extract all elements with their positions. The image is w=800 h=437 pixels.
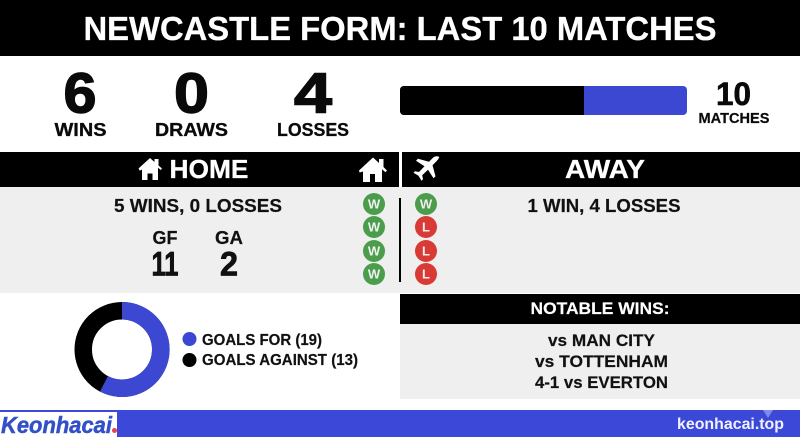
- panel: notable wins: [400, 294, 800, 399]
- notable wins heading: NOTABLE WINS:: [530, 299, 670, 318]
- stat: total matches: 10: [716, 76, 751, 112]
- home result badges: W: [368, 196, 381, 212]
- away header band: AWAY: [565, 154, 645, 184]
- title banner: [0, 0, 800, 56]
- away result badges: L: [422, 220, 430, 234]
- home header band: HOME: [170, 154, 248, 184]
- stat: wins: [54, 62, 106, 140]
- panel: home and away results: [0, 187, 800, 293]
- away header band: [402, 152, 800, 187]
- away result badges: L: [422, 244, 430, 258]
- legend: GOALS AGAINST (13): [202, 352, 358, 369]
- home record: 5 WINS, 0 LOSSES: [114, 195, 282, 216]
- icon: home large: [359, 158, 387, 182]
- away result badges: L: [422, 266, 430, 282]
- stat: goals for home: 11: [152, 246, 178, 284]
- stat: goals against home: 2: [220, 246, 238, 284]
- notable wins list: vs TOTTENHAM: [535, 352, 668, 371]
- title banner: NEWCASTLE FORM: LAST 10 MATCHES: [84, 10, 716, 47]
- icon: home small: [138, 158, 162, 180]
- stat: goals for home: [152, 228, 178, 284]
- home header band: [0, 152, 399, 187]
- home result badges: W: [368, 220, 381, 234]
- notable wins list: vs MAN CITY: [548, 331, 656, 350]
- progress bar: 6 wins of 10 matches: [400, 86, 687, 115]
- footer url: keonhacai.top: [677, 416, 784, 433]
- stat: wins: WINS: [54, 120, 106, 140]
- stat: goals against home: [215, 228, 243, 284]
- divider between home and away: [399, 198, 401, 282]
- notable wins list: 4-1 vs EVERTON: [535, 373, 668, 392]
- home result badges: W: [368, 244, 381, 258]
- stat: losses: [277, 62, 349, 140]
- footer bar: [0, 410, 800, 437]
- stat: total matches: MATCHES: [698, 111, 770, 127]
- footer sparkle: [763, 410, 773, 418]
- away result badges: W: [420, 196, 433, 212]
- stat: losses: 4: [294, 62, 332, 126]
- icon: plane: [414, 156, 439, 181]
- legend: GOALS FOR (19): [202, 332, 322, 349]
- stat: draws: 0: [174, 62, 209, 126]
- stat: losses: LOSSES: [277, 120, 349, 140]
- legend: [182, 332, 358, 369]
- donut chart: goals for vs against: [83, 302, 170, 397]
- stat: wins: 6: [64, 62, 96, 126]
- stat: draws: [155, 62, 228, 140]
- stat: draws: DRAWS: [155, 120, 228, 140]
- stat: goals against home: GA: [215, 228, 243, 248]
- away record: 1 WIN, 4 LOSSES: [528, 195, 680, 216]
- away result badges: [415, 193, 437, 285]
- home result badges: W: [368, 266, 381, 282]
- notable wins list: [535, 331, 668, 392]
- home result badges: [363, 193, 385, 285]
- stat: goals for home: GF: [152, 228, 178, 248]
- stat: total matches: [698, 76, 770, 127]
